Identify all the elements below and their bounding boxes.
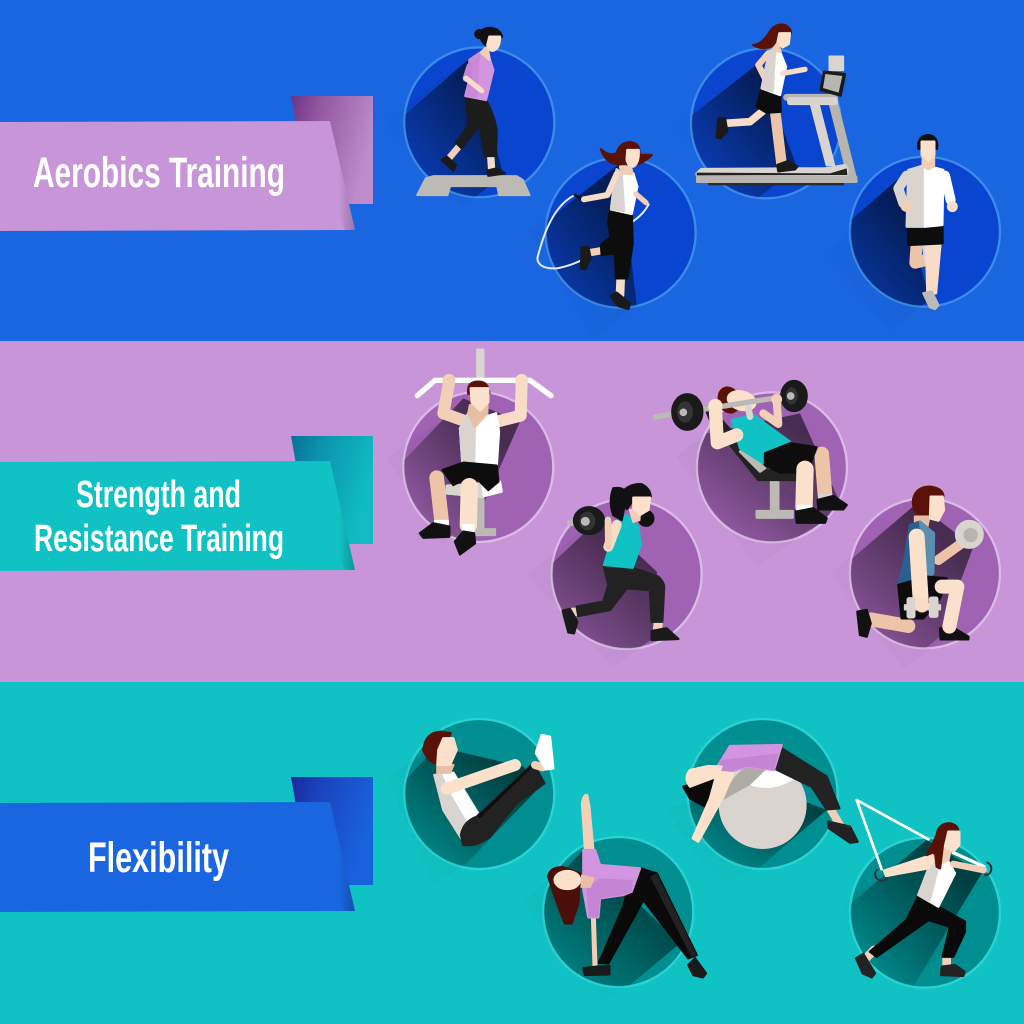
figure: woman skipping rope — [536, 141, 697, 310]
banner: aerobics training — [0, 96, 373, 231]
treadmill — [696, 57, 857, 185]
banner title line two: Resistance Training — [34, 518, 284, 560]
figure: woman running on treadmill — [690, 24, 858, 200]
figure: woman on aerobic step — [403, 26, 556, 198]
figure: man jogging — [848, 134, 1002, 310]
figure: man lunging with dumbbells — [848, 486, 1002, 650]
banner title: Flexibility — [88, 834, 229, 882]
figure: man on lat pulldown machine — [387, 350, 553, 554]
figure: man bench pressing barbell — [652, 380, 848, 544]
figure: woman lunging with barbell — [550, 483, 703, 650]
banner title: Aerobics Training — [33, 149, 285, 197]
banner title line one: Strength and — [76, 474, 241, 516]
figure: woman stretching on exercise ball — [682, 718, 859, 870]
panel: aerobics training — [0, 24, 1002, 310]
figure: woman in triangle stretch — [542, 794, 708, 988]
panel: strength and resistance training — [0, 341, 1024, 683]
banner: strength and resistance training — [0, 436, 373, 571]
panel: flexibility — [0, 682, 1024, 1024]
figure: woman pulling resistance bands — [840, 800, 1000, 988]
figure: man in v-sit pose — [403, 718, 556, 870]
banner: flexibility — [0, 777, 373, 912]
